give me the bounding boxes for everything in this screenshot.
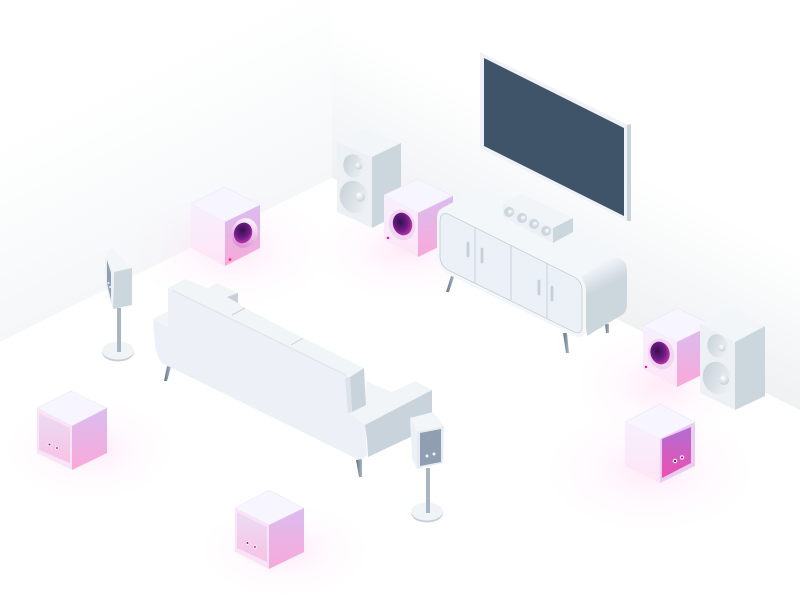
front panel <box>107 260 111 300</box>
stand speaker right <box>410 412 444 522</box>
sofa <box>153 279 432 477</box>
cabinet front <box>437 208 586 337</box>
top <box>700 308 765 342</box>
left wall <box>0 0 332 342</box>
left arm top <box>153 311 168 327</box>
indicator light <box>229 258 231 261</box>
active panel <box>662 427 691 478</box>
cabinet side <box>113 268 132 309</box>
driver dots <box>246 541 257 549</box>
upper woofer <box>704 331 731 361</box>
top <box>337 128 401 157</box>
side <box>372 143 401 228</box>
subwoofer beside tower <box>643 308 712 387</box>
tower speaker left <box>336 128 401 228</box>
base <box>411 504 443 522</box>
seat and arm top <box>348 381 432 425</box>
stand speaker left <box>102 248 134 362</box>
left leg <box>446 276 454 292</box>
tv side edge <box>627 124 631 221</box>
cabinet top <box>105 248 132 272</box>
driver dots <box>108 282 111 288</box>
driver dots <box>673 455 684 463</box>
back end face <box>350 368 366 412</box>
lower woofer <box>336 177 372 217</box>
subwoofer near tv <box>384 179 453 257</box>
right wall <box>332 0 800 410</box>
tv <box>480 52 631 221</box>
speaker cone <box>385 206 419 244</box>
indicator light <box>387 237 389 239</box>
driver dots <box>426 452 436 458</box>
wireless speaker back center <box>235 490 304 569</box>
driver dots <box>48 443 59 450</box>
cabinet side <box>580 258 627 336</box>
base top <box>411 502 443 520</box>
cabinet side <box>410 418 417 469</box>
back cushion shadow <box>227 293 238 303</box>
front panel <box>237 512 267 562</box>
front <box>337 142 372 228</box>
right leg <box>563 333 569 353</box>
back top <box>168 279 363 377</box>
right leg <box>356 459 362 477</box>
end stripe <box>345 377 352 413</box>
front <box>700 324 735 410</box>
pole <box>117 308 121 352</box>
base top <box>102 342 134 360</box>
back body <box>153 288 367 459</box>
base <box>102 342 134 362</box>
tv screen <box>484 58 624 216</box>
cabinet front <box>417 426 444 469</box>
drivers <box>504 207 551 236</box>
side <box>735 326 765 410</box>
tv frame <box>480 52 628 221</box>
lower woofer <box>699 358 735 398</box>
floor glows <box>5 192 755 596</box>
subwoofer left wall <box>191 187 262 266</box>
door dividers <box>475 228 547 318</box>
left leg <box>164 366 171 381</box>
upper woofer <box>340 151 367 181</box>
front panel <box>39 413 70 463</box>
indicator light <box>645 366 647 368</box>
tower speaker right <box>643 308 765 410</box>
door panel <box>440 214 582 333</box>
back legs <box>605 324 609 333</box>
wireless speaker back left <box>37 391 107 470</box>
door handles <box>468 243 552 300</box>
cabinet top <box>410 412 444 432</box>
arm side <box>365 390 432 457</box>
cabinet top <box>440 187 627 292</box>
media cabinet <box>437 187 627 353</box>
speaker cone <box>227 214 262 252</box>
seams <box>172 290 346 375</box>
center channel speaker <box>503 194 573 243</box>
front panel <box>420 429 441 466</box>
floor <box>0 178 800 600</box>
speaker cone <box>644 335 678 373</box>
cabinet front <box>105 255 113 309</box>
wireless speaker right active <box>625 404 695 483</box>
pole <box>426 468 430 513</box>
